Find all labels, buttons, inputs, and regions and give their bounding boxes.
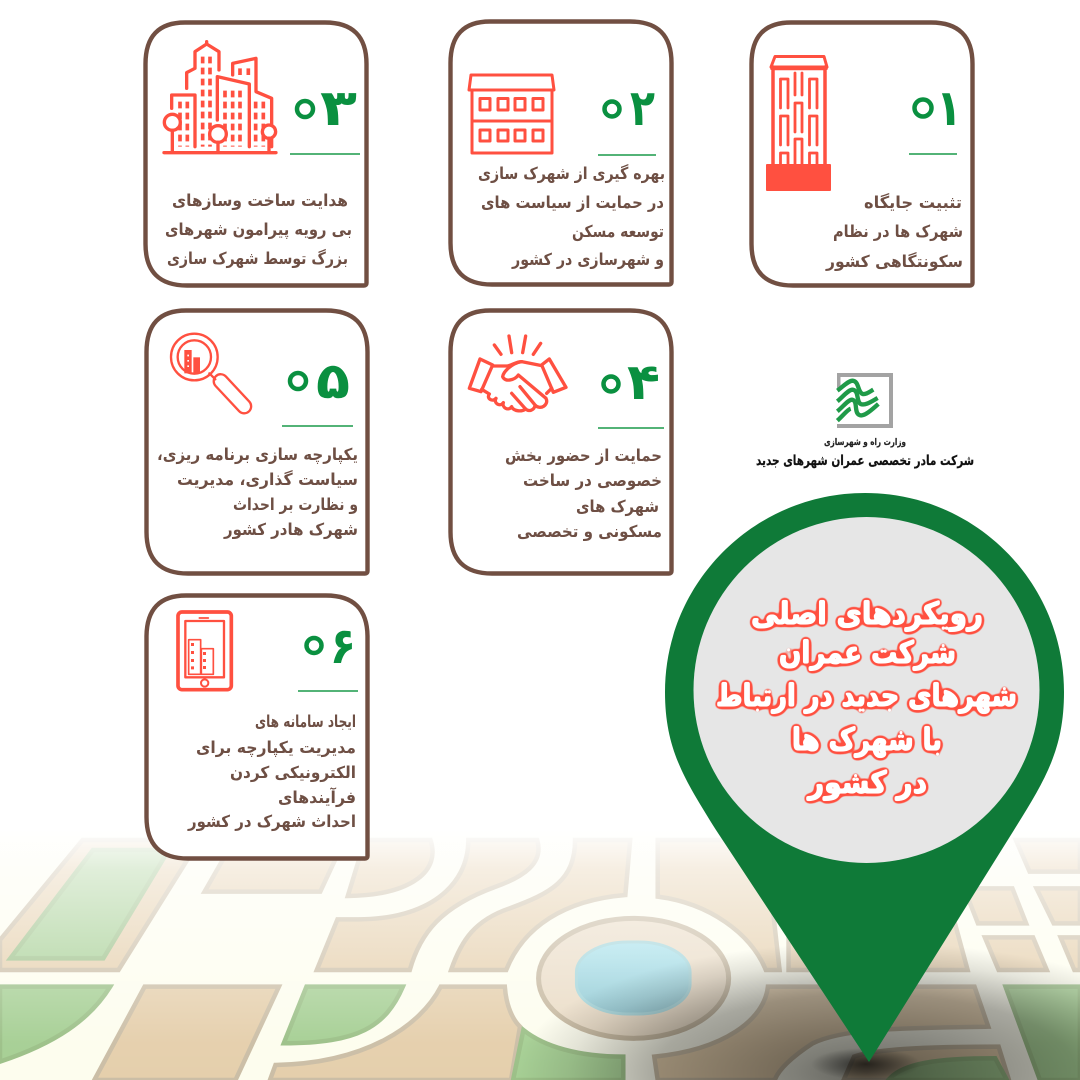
- text 05: شهرک هادر کشور: [223, 520, 358, 540]
- text 04: مسکونی و تخصصی: [517, 522, 662, 542]
- number 02: [604, 79, 655, 137]
- text 01: سکونتگاهی کشور: [825, 251, 963, 272]
- number 04: ۰: [606, 371, 616, 395]
- logo mark: [837, 373, 893, 428]
- text 05: سیاست گذاری، مدیریت: [177, 469, 358, 490]
- icon: handshake: [469, 336, 566, 411]
- icon: tower: [766, 56, 831, 191]
- logo: وزارت راه و شهرسازی: [824, 437, 906, 448]
- text 06: ایجاد سامانه های: [255, 712, 356, 731]
- text 03: هدایت ساخت وسازهای: [172, 191, 348, 211]
- text 04: شهرک های: [576, 497, 659, 517]
- number 02: ۰: [607, 96, 617, 120]
- text 05: و نظارت بر احداث: [233, 495, 358, 515]
- text 02: در حمایت از سیاست های: [481, 193, 664, 212]
- text 06: مدیریت یکپارچه برای: [196, 738, 356, 758]
- number 05: ۰: [293, 369, 303, 393]
- text 02: [478, 163, 665, 270]
- panel: 06: [146, 596, 368, 858]
- text 06: الکترونیکی کردن: [230, 763, 356, 783]
- panel: 05: [146, 310, 368, 574]
- text 01: [825, 192, 963, 272]
- icon: building: [469, 75, 554, 153]
- background: city map: [0, 830, 1080, 1080]
- text 03: [165, 191, 352, 269]
- text 04: [505, 446, 662, 542]
- text 04: حمایت از حضور بخش: [505, 446, 662, 466]
- text 01: شهرک ها در نظام: [833, 222, 963, 242]
- icon: tablet: [178, 612, 231, 690]
- number 05: ۵: [316, 352, 350, 410]
- panel: 03: [146, 22, 366, 286]
- pin title: [716, 596, 1017, 801]
- pin title: با شهرک ها: [792, 722, 942, 758]
- text 02: و شهرسازی در کشور: [511, 250, 664, 270]
- number 04: [604, 353, 660, 411]
- text 04: خصوصی در ساخت: [523, 471, 662, 491]
- text 06: [187, 712, 356, 832]
- panel: 04: [450, 310, 672, 574]
- logo: [756, 373, 974, 469]
- text 02: توسعه مسکن: [572, 222, 664, 242]
- text 06: احداث شهرک در کشور: [187, 812, 356, 832]
- panel: 02: [450, 22, 672, 284]
- text 06: فرآیندهای: [278, 786, 356, 808]
- pin title: شهرهای جدید در ارتباط: [716, 678, 1017, 714]
- number 06: ۰: [309, 633, 319, 657]
- icon: magnifier: [171, 334, 254, 416]
- number 06: [306, 617, 356, 675]
- icon: city: [164, 42, 276, 153]
- pin title: رویکردهای اصلی: [751, 596, 983, 632]
- number 04: ۴: [627, 353, 660, 411]
- text 03: بی رویه پیرامون شهرهای: [165, 220, 352, 240]
- panel: 01: [752, 22, 972, 286]
- number 01: ۱: [936, 79, 962, 137]
- text 03: بزرگ توسط شهرک سازی: [167, 249, 348, 269]
- number 06: ۶: [330, 617, 356, 675]
- location pin: [665, 493, 1064, 1062]
- number 03: ۳: [320, 79, 357, 137]
- number 03: [297, 79, 357, 137]
- text 01: تثبیت جایگاه: [864, 192, 962, 212]
- logo: شرکت مادر تخصصی عمران شهرهای جدید: [756, 453, 974, 469]
- number 03: ۰: [300, 96, 310, 120]
- number 05: [290, 352, 350, 410]
- pin title: شرکت عمران: [779, 635, 956, 671]
- pin title: در کشور: [806, 765, 927, 801]
- text 05: یکپارچه سازی برنامه ریزی،: [157, 445, 358, 465]
- number 01: [914, 79, 962, 137]
- text 05: [157, 445, 358, 540]
- number 01: ۰: [918, 96, 928, 120]
- number 02: ۲: [630, 79, 655, 137]
- text 02: بهره گیری از شهرک سازی: [478, 163, 665, 184]
